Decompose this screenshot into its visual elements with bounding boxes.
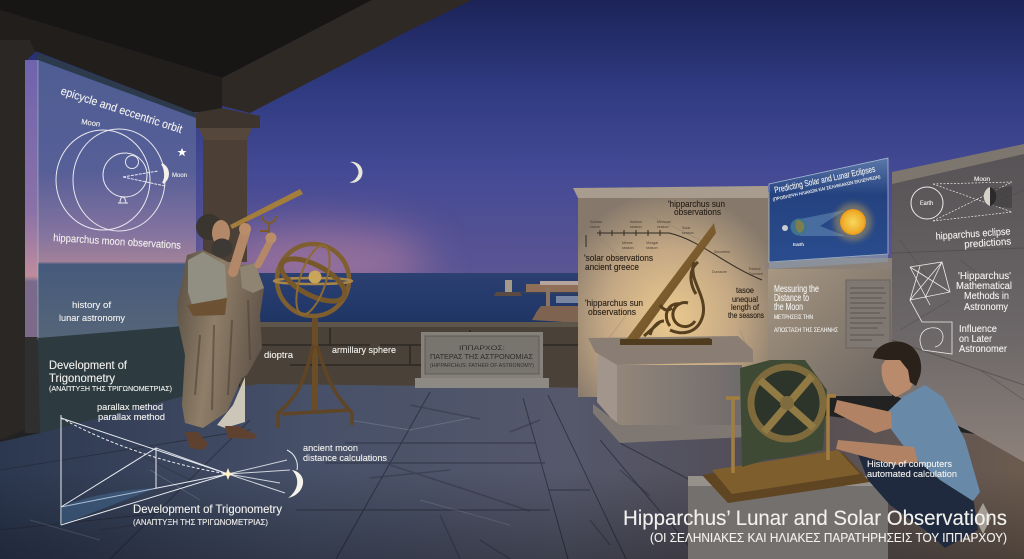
heading: measuring the distance: Messuring the <box>774 284 819 295</box>
terrace wall <box>240 322 580 388</box>
season labels: season <box>646 246 658 250</box>
hair <box>873 342 921 386</box>
caption: influence on later astronomer: on Later <box>959 334 993 345</box>
sandals <box>185 426 257 450</box>
season labels: Mensual <box>657 220 671 224</box>
plaque: father of astronomy: (HIPPARCHUS: FATHER OF ASTRONOMY) <box>430 363 534 369</box>
hands <box>239 223 276 244</box>
caption: mathematical methods: Methods in <box>964 291 1009 302</box>
label: moon right: Moon <box>172 172 187 179</box>
label: hipparchus sun observations lower: 'hipparchus sun <box>585 298 643 308</box>
icon: armillary sphere <box>274 242 352 428</box>
season labels: Vinogal <box>646 241 658 245</box>
season labels: season <box>622 246 634 250</box>
label: hipparchus sun observations lower: observations <box>588 307 636 317</box>
icon: sun <box>840 209 866 235</box>
label: ancient moon distance calculations: distance calculations <box>303 453 387 463</box>
subheading: greek eclipses: (ΠΡΟΒΛΕΨΗ ΗΛΙΑΚΩΝ ΚΑΙ ΣΕΛΗΝΙΑΚΩΝ ΕΚΛΕΙΨΕΩΝ) <box>772 174 881 202</box>
icon: star <box>178 148 186 156</box>
label: unequal length of the seasons: tasoe <box>736 285 754 295</box>
telescope mount <box>260 216 276 240</box>
caption: influence on later astronomer: Astronomer <box>959 344 1008 355</box>
caption: hipparchus eclipse predictions: predictions <box>964 236 1012 251</box>
label: solar observations ancient greece: 'solar observations <box>584 253 653 263</box>
label: history of computers: History of computers <box>867 459 953 469</box>
heading: epicycle and eccentric orbit: epicycle and eccentric orbit <box>59 85 184 136</box>
panel: predicting eclipses glass <box>769 158 888 269</box>
label: ancient moon distance calculations: ancient moon <box>303 443 358 453</box>
icon: eclipse moon lit <box>984 187 990 206</box>
shirt <box>882 385 980 501</box>
plaque: father of astronomy: ΠΑΤΕΡΑΣ ΤΗΣ ΑΣΤΡΟΝΟΜΙΑΣ <box>430 354 534 361</box>
heading: measuring the distance: Distance to <box>774 293 809 304</box>
blue shaded wedge <box>61 488 156 525</box>
title: Hipparchus’ Lunar and Solar Observations <box>623 507 1007 530</box>
corroded fragment <box>740 360 827 467</box>
season labels: Aestuni <box>630 220 642 224</box>
left pillar <box>0 40 35 440</box>
arms <box>834 400 918 465</box>
figure: young man <box>834 342 980 548</box>
icon: earth <box>790 218 808 236</box>
label: unequal length of the seasons: unequal <box>732 294 758 304</box>
caption: mathematical methods: 'Hipparchus' <box>958 271 1011 282</box>
icon: moon <box>782 225 788 231</box>
label: moon top: Moon <box>81 117 101 129</box>
trousers <box>857 445 978 548</box>
caption: influence on later astronomer: Influence <box>959 324 997 335</box>
head <box>882 354 918 397</box>
icon: crescent moon on floor <box>288 470 303 498</box>
stand <box>312 318 318 410</box>
heading: predicting solar and lunar eclipses: Predicting Solar and Lunar Eclipses <box>773 164 877 195</box>
caption: history of lunar astronomy: lunar astronomy <box>59 313 125 324</box>
robe <box>177 250 264 428</box>
label: unequal length of the seasons: length of <box>731 302 760 312</box>
label: hipparchus sun observations top: 'hipparchus sun <box>668 199 725 209</box>
stepped bronze base <box>702 453 870 503</box>
icon: sparkle <box>975 503 991 534</box>
subheading: greek floor: (ΑΝΑΠΤΥΞΗ ΤΗΣ ΤΡΙΓΩΝΟΜΕΤΡΙΑΣ) <box>133 517 268 527</box>
icon: bronze sundial <box>620 223 716 345</box>
marble floor <box>0 384 1024 559</box>
diagram: parallax method <box>61 402 387 527</box>
label: hipparchus sun observations top: observations <box>674 207 721 217</box>
caption: hipparchus moon observations: hipparchus moon observations <box>53 232 181 252</box>
panel: right marble wall <box>892 144 1024 462</box>
brown sash <box>187 298 227 316</box>
season labels: season <box>630 225 642 229</box>
caption: mathematical methods: Astronomy <box>964 302 1008 313</box>
frame uprights <box>726 395 836 473</box>
season labels: Secoreine <box>714 250 730 254</box>
caption: history of lunar astronomy: history of <box>72 300 111 311</box>
background: sea <box>0 273 600 330</box>
label: history of computers: automated calculation <box>867 469 957 479</box>
timeline chart <box>597 233 762 280</box>
panel: marble wall moon distance <box>765 258 892 396</box>
gear spokes <box>760 376 814 432</box>
season labels: season <box>657 225 669 229</box>
raised arms <box>233 233 245 272</box>
subheading: greek distance: ΜΕΤΡΗΣΕΙΣ ΤΗΝ <box>774 315 813 321</box>
shoulder drape <box>188 252 227 308</box>
text card <box>846 280 890 348</box>
diagram: earth moon eclipse <box>911 182 1012 221</box>
label: parallax method: parallax method <box>97 402 163 413</box>
season labels: season <box>682 231 694 235</box>
label: dioptra: dioptra <box>264 350 293 360</box>
heading: development of trigonometry floor: Development of Trigonometry <box>133 502 282 516</box>
season labels <box>590 220 763 276</box>
face <box>212 220 230 246</box>
subheading: greek distance: ΑΠΟΣΤΑΣΗ ΤΗΣ ΣΕΛΗΝΗΣ <box>774 328 838 334</box>
icon: crescent moon in sky <box>350 162 363 183</box>
label: solar observations ancient greece: ancient greece <box>585 262 639 272</box>
diagram: moon orbit <box>56 129 165 231</box>
plaque: father of astronomy <box>415 332 549 388</box>
icon: orbit crescent moon <box>162 164 168 183</box>
label: armillary sphere: armillary sphere <box>332 345 396 355</box>
plaque: father of astronomy: ΙΠΠΑΡΧΟΣ: <box>459 345 505 352</box>
caption: hipparchus eclipse predictions: hipparchus eclipse <box>935 226 1011 243</box>
season labels: Solstad <box>590 220 602 224</box>
season labels: Meses <box>622 241 633 245</box>
pink horizon glow <box>210 227 430 297</box>
heading: development of trigonometry: Development of <box>49 358 128 372</box>
background: evening sky <box>0 0 1024 282</box>
label: earth: Earth <box>793 242 804 247</box>
icon: star at focus <box>222 468 234 480</box>
ceiling and beams <box>0 0 472 113</box>
subtitle: (ΟΙ ΣΕΛΗΝΙΑΚΕΣ ΚΑΙ ΗΛΙΑΚΕΣ ΠΑΡΑΤΗΡΗΣΕΙΣ ΤΟΥ ΙΠΠΑΡΧΟΥ) <box>650 531 1007 545</box>
gear hub <box>780 396 794 410</box>
glass base block <box>38 325 196 433</box>
label: unequal length of the seasons: the seasons <box>728 310 764 320</box>
strip of sky beside glass <box>25 60 40 433</box>
heading: development of trigonometry: Trigonometry <box>49 371 115 385</box>
season labels: canon <box>590 225 600 229</box>
label: parallax method: parallax method <box>98 412 165 423</box>
parallax geometry lines <box>61 415 297 525</box>
sleeve <box>240 263 264 293</box>
season labels: Donnant <box>749 272 763 276</box>
figure: hipparchus <box>177 189 303 450</box>
white under-robe <box>217 377 245 428</box>
diagram: mathematical network <box>910 262 952 354</box>
harbour with lighthouses <box>494 280 580 323</box>
heading: measuring the distance: the Moon <box>774 302 803 313</box>
earth landmass <box>795 220 804 233</box>
beard <box>212 238 232 258</box>
label: earth: Earth <box>920 201 933 207</box>
icon: antikythera mechanism <box>702 360 870 503</box>
pedestal under sundial <box>588 336 753 443</box>
telescope <box>230 189 303 229</box>
panel: lunar observations glass <box>38 53 196 433</box>
icon: eclipse moon shadow <box>990 187 996 206</box>
eclipse shadow cone <box>800 210 845 236</box>
label: moon: Moon <box>974 176 990 183</box>
plinth under mechanism <box>688 476 888 559</box>
season labels: Eskicol <box>749 267 761 271</box>
column with capital <box>188 108 260 262</box>
gear ring <box>751 367 823 439</box>
subheading: greek trigonometry: (ΑΝΑΠΤΥΞΗ ΤΗΣ ΤΡΙΓΩΝΟΜΕΤΡΙΑΣ) <box>49 384 172 393</box>
panel: marble wall solar observations <box>573 186 770 397</box>
caption: mathematical methods: Mathematical <box>956 281 1012 292</box>
hair <box>196 214 222 240</box>
icon: sun glow <box>834 203 872 241</box>
season labels: Solar <box>682 226 691 230</box>
season labels: Durosore <box>712 270 727 274</box>
